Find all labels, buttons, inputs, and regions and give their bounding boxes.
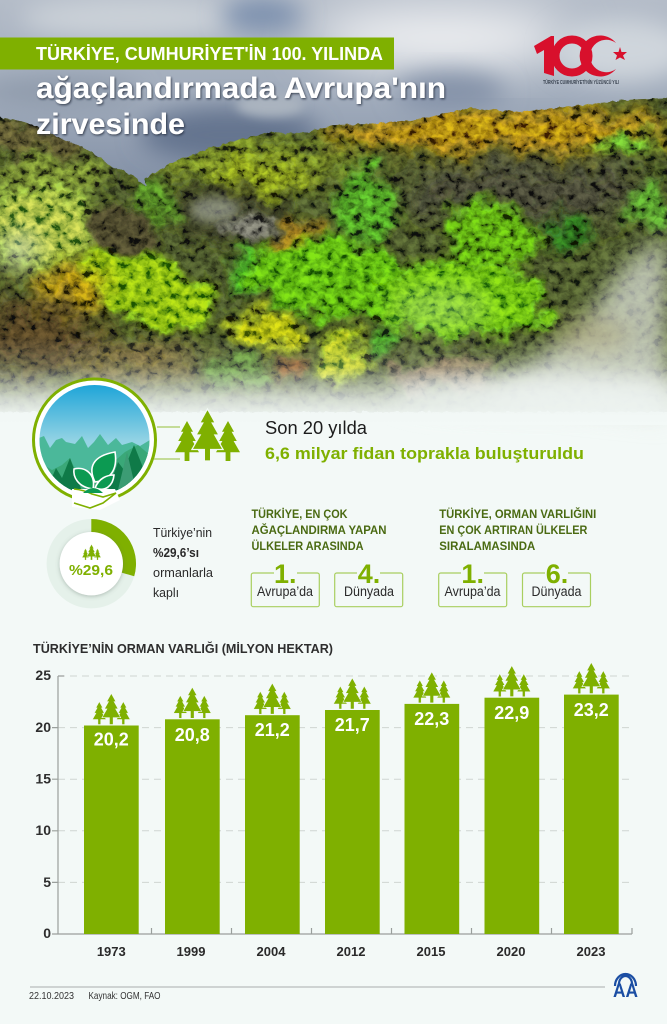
icon: seedling in hand inside forest circle (34, 379, 156, 510)
bar: 2012: 2012 (337, 944, 365, 959)
bar: 1973: 1973 (97, 944, 126, 959)
drifting fog (0, 197, 667, 420)
text: 6.6 billion saplings (265, 417, 584, 463)
bar: 2023: 23,2 (574, 700, 609, 720)
y axis: 15 (35, 770, 51, 786)
bar: 2023 (564, 662, 619, 959)
footer: date and source: Kaynak: OGM, FAO (88, 991, 161, 1002)
bar: 2015 (404, 672, 459, 959)
bar: 2004: 2004 (257, 944, 286, 959)
footer: date and source (29, 987, 605, 1002)
sky with clouds (0, 0, 667, 200)
y axis: 0 (43, 925, 51, 941)
x axis (58, 928, 632, 934)
photo: forested mountain under cloudy sky (0, 0, 667, 430)
text: forest cover description (153, 525, 214, 600)
ranking heading: afforestation: AĞAÇLANDIRMA YAPAN (252, 524, 386, 537)
rank box: 4th in the world: Dünyada (344, 584, 394, 599)
rank box: 1st in Europe, forest increase: 1. (461, 559, 484, 589)
rank box: 4th in the world (335, 559, 403, 607)
rank box: 6th in the world (522, 559, 590, 607)
y axis (35, 667, 64, 941)
main title: ağaçlandırmada Avrupa'nın (36, 72, 446, 105)
header strip: green title bar (0, 38, 394, 70)
bar: 2020: 22,9 (494, 703, 529, 723)
bar: 2023: 2023 (577, 944, 605, 959)
text: 6.6 billion saplings: 6,6 milyar fidan toprakla buluşturuldu (265, 444, 584, 463)
logo: Republic 100th year: TÜRKİYE CUMHURİYETİ'NİN YÜZÜNCÜ YILI (543, 79, 619, 86)
bar: 2004 (245, 683, 300, 959)
forested hills (0, 98, 667, 414)
text: forest cover description: %29,6’sı (153, 545, 199, 560)
ranking heading: forest increase (439, 508, 596, 553)
chart heading: TÜRKİYE’NİN ORMAN VARLIĞI (MİLYON HEKTAR) (33, 641, 333, 656)
logo: Anadolu Agency: AA (613, 981, 638, 1002)
bar: 1999: 1999 (177, 944, 205, 959)
bar: 1999 (165, 687, 220, 959)
rank box: 1st in Europe, forest increase: Avrupa’da (444, 584, 501, 599)
bar: 1999: 20,8 (175, 725, 210, 745)
text: 6.6 billion saplings: Son 20 yılda (265, 417, 368, 438)
bar: 2004: 21,2 (255, 720, 290, 740)
main title (36, 72, 446, 141)
rank box: 1st in Europe, forest increase (439, 559, 507, 607)
text: forest cover description: ormanlarla (153, 565, 214, 580)
bar: 1973: 20,2 (94, 730, 129, 750)
y axis: 25 (35, 667, 51, 683)
bar: 2012: 21,7 (335, 715, 370, 735)
rank box: 1st in Europe: 1. (274, 559, 297, 589)
icon: three pine trees with connector lines (154, 409, 240, 461)
footer: date and source: 22.10.2023 (29, 991, 74, 1002)
donut: 29.6% forest cover: %29,6 (69, 563, 113, 579)
bar: 2012 (325, 678, 380, 959)
y axis: 20 (35, 719, 51, 735)
ranking heading: forest increase: EN ÇOK ARTIRAN ÜLKELER (439, 524, 588, 537)
bar: 2015: 2015 (417, 944, 445, 959)
rank box: 1st in Europe: Avrupa’da (257, 584, 313, 599)
donut: 29.6% forest cover (47, 519, 136, 608)
y axis: 5 (43, 874, 51, 890)
rank box: 6th in the world: 6. (546, 559, 568, 589)
bar: 2015: 22,3 (414, 709, 449, 729)
logo: Republic 100th year (534, 36, 627, 86)
ranking heading: afforestation: ÜLKELER ARASINDA (252, 540, 364, 553)
bar: 2020: 2020 (497, 944, 525, 959)
rank box: 6th in the world: Dünyada (532, 584, 582, 599)
rank box: 4th in the world: 4. (358, 559, 380, 589)
ranking heading: forest increase: SIRALAMASINDA (439, 541, 535, 553)
bar: 1973 (84, 693, 139, 959)
text: forest cover description: Türkiye’nin (153, 525, 212, 540)
ranking heading: afforestation: TÜRKİYE, EN ÇOK (252, 508, 348, 521)
bar: 2020 (484, 666, 539, 959)
ranking heading: afforestation (252, 508, 386, 553)
header strip: green title bar: TÜRKİYE, CUMHURİYET'İN 100. YILINDA (36, 44, 383, 64)
main title: zirvesinde (36, 108, 185, 141)
mist fade into page (0, 335, 667, 425)
ranking heading: forest increase: TÜRKİYE, ORMAN VARLIĞINI (439, 508, 596, 521)
rank box: 1st in Europe (251, 559, 319, 607)
text: forest cover description: kaplı (153, 585, 179, 600)
bar chart: forest area by year (35, 662, 632, 959)
y axis: 10 (35, 822, 51, 838)
